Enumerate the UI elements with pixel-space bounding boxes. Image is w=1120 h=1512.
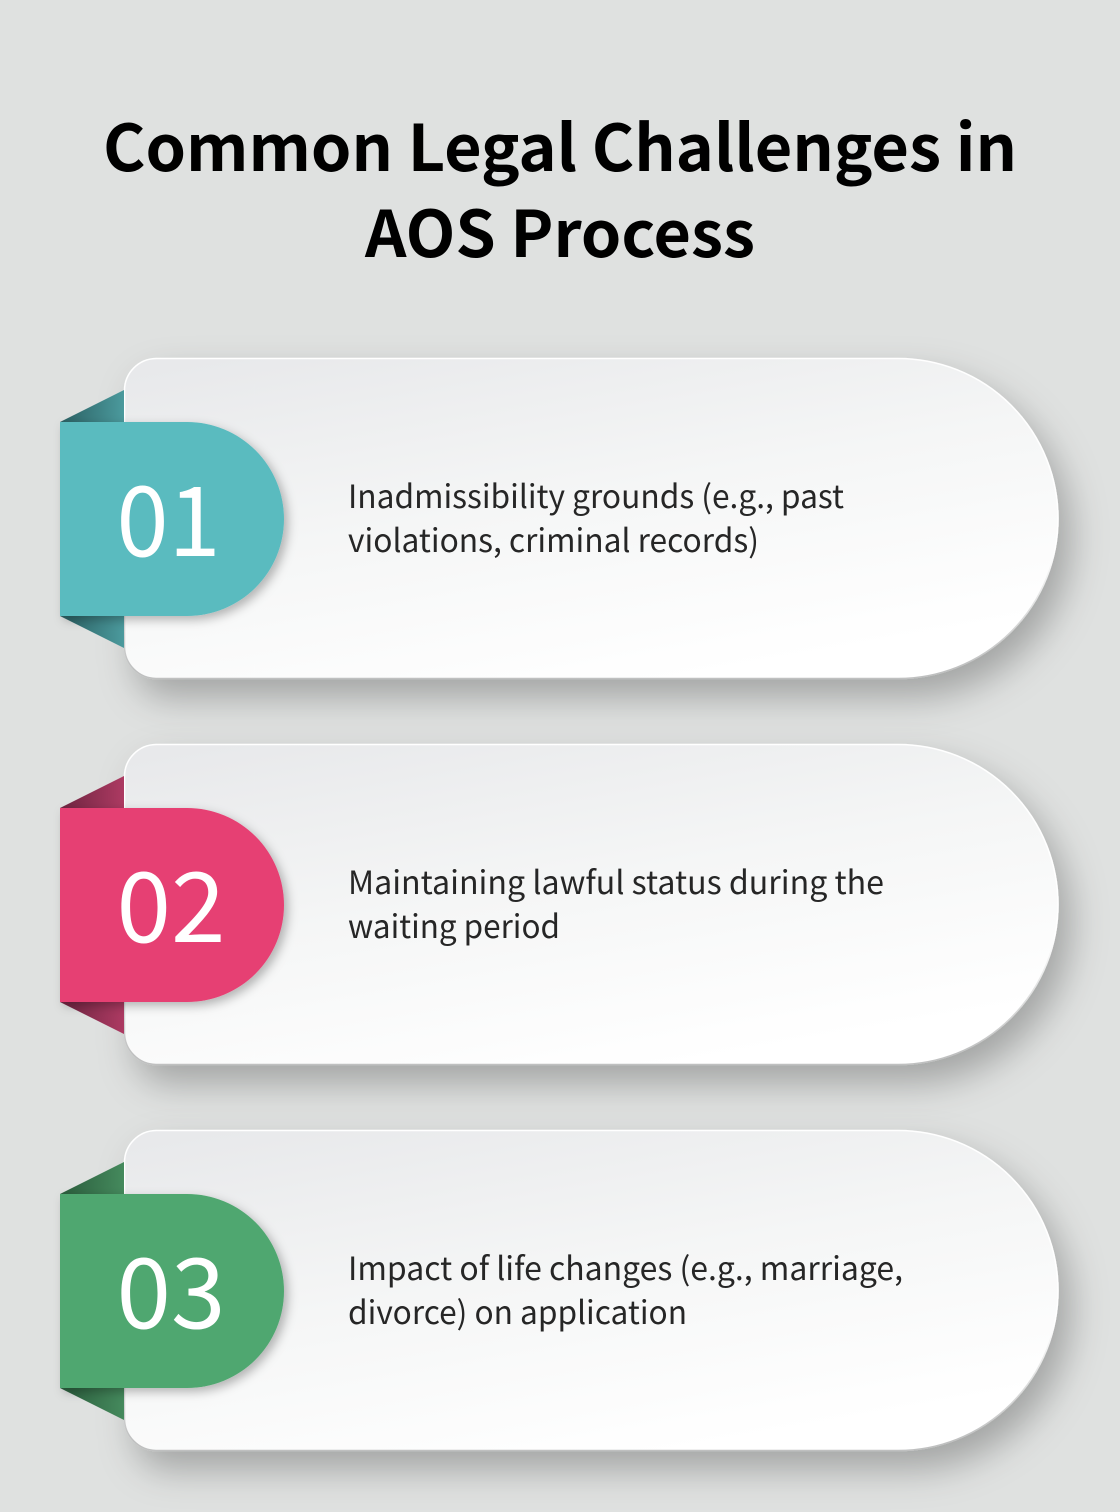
text 03 <box>348 1244 903 1334</box>
number 01: 01 <box>116 443 220 584</box>
ribbon folds 01 <box>60 390 124 648</box>
ribbon folds 02 <box>60 776 124 1034</box>
title <box>103 98 1017 276</box>
text 01: Inadmissibility grounds (e.g., past <box>348 472 844 518</box>
title: Common Legal Challenges in <box>103 98 1017 190</box>
panel: item 01 <box>60 358 1058 678</box>
number tab 03 <box>60 1194 284 1388</box>
text 03: divorce) on application <box>348 1288 687 1334</box>
panel: item 02 <box>60 744 1058 1064</box>
text 01: violations, criminal records) <box>348 516 759 562</box>
card 02 <box>124 744 1058 1064</box>
card 03 <box>124 1130 1058 1450</box>
text 03: Impact of life changes (e.g., marriage, <box>348 1244 903 1290</box>
card 01 <box>124 358 1058 678</box>
number tab 01 <box>60 422 284 616</box>
ribbon folds 03 <box>60 1162 124 1420</box>
text 02: waiting period <box>348 902 560 948</box>
number 02: 02 <box>116 829 226 970</box>
title: AOS Process <box>364 184 755 276</box>
number 03: 03 <box>116 1215 226 1356</box>
panel: item 03 <box>60 1130 1058 1450</box>
text 02: Maintaining lawful status during the <box>348 858 884 904</box>
text 01 <box>348 472 844 562</box>
number tab 02 <box>60 808 284 1002</box>
text 02 <box>348 858 884 948</box>
